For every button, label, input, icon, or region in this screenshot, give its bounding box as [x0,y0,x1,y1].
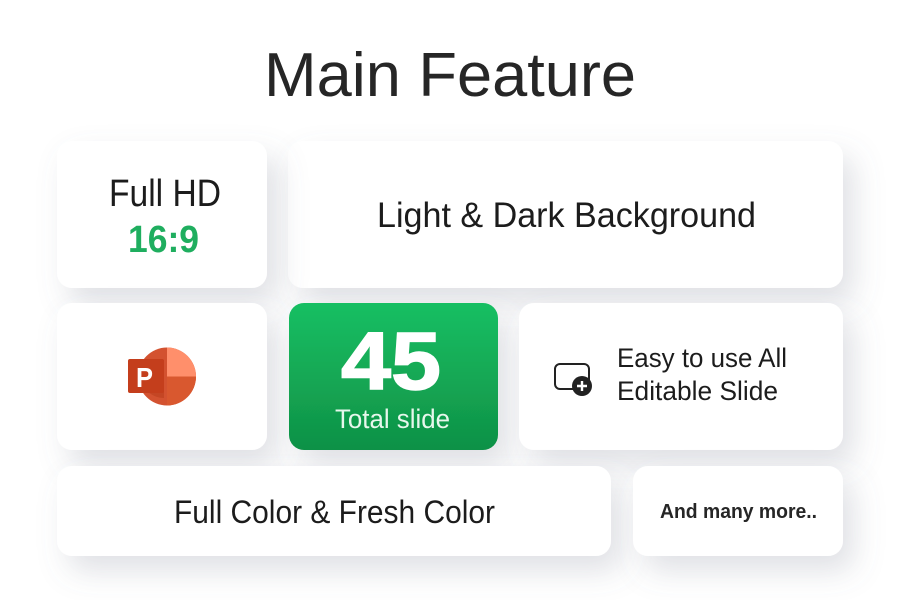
text: easy to use [617,343,787,406]
panel: total slides [289,303,498,450]
panel: light and dark background: Light & Dark Background [377,196,756,235]
number: 45: 45 [341,316,441,407]
panel: full color [57,466,611,556]
text: full hd: Full HD [109,173,221,215]
text: total slide: Total slide [335,404,450,434]
icon: powerpoint logo: P [136,362,153,393]
text: easy to use: Editable Slide [617,376,778,406]
panel: powerpoint [57,303,267,450]
text: aspect ratio: 16:9 [128,219,199,261]
title: Main Feature [264,41,636,110]
panel: full hd [57,141,267,288]
panel: editable slide [519,303,843,450]
text: easy to use: Easy to use All [617,343,787,373]
panel: and many more [633,466,843,556]
icon: powerpoint logo [128,348,196,406]
panel: and many more: And many more.. [660,501,817,523]
panel: light and dark background [288,141,843,288]
icon: add slide [555,364,592,396]
panel: full color: Full Color & Fresh Color [174,494,495,530]
